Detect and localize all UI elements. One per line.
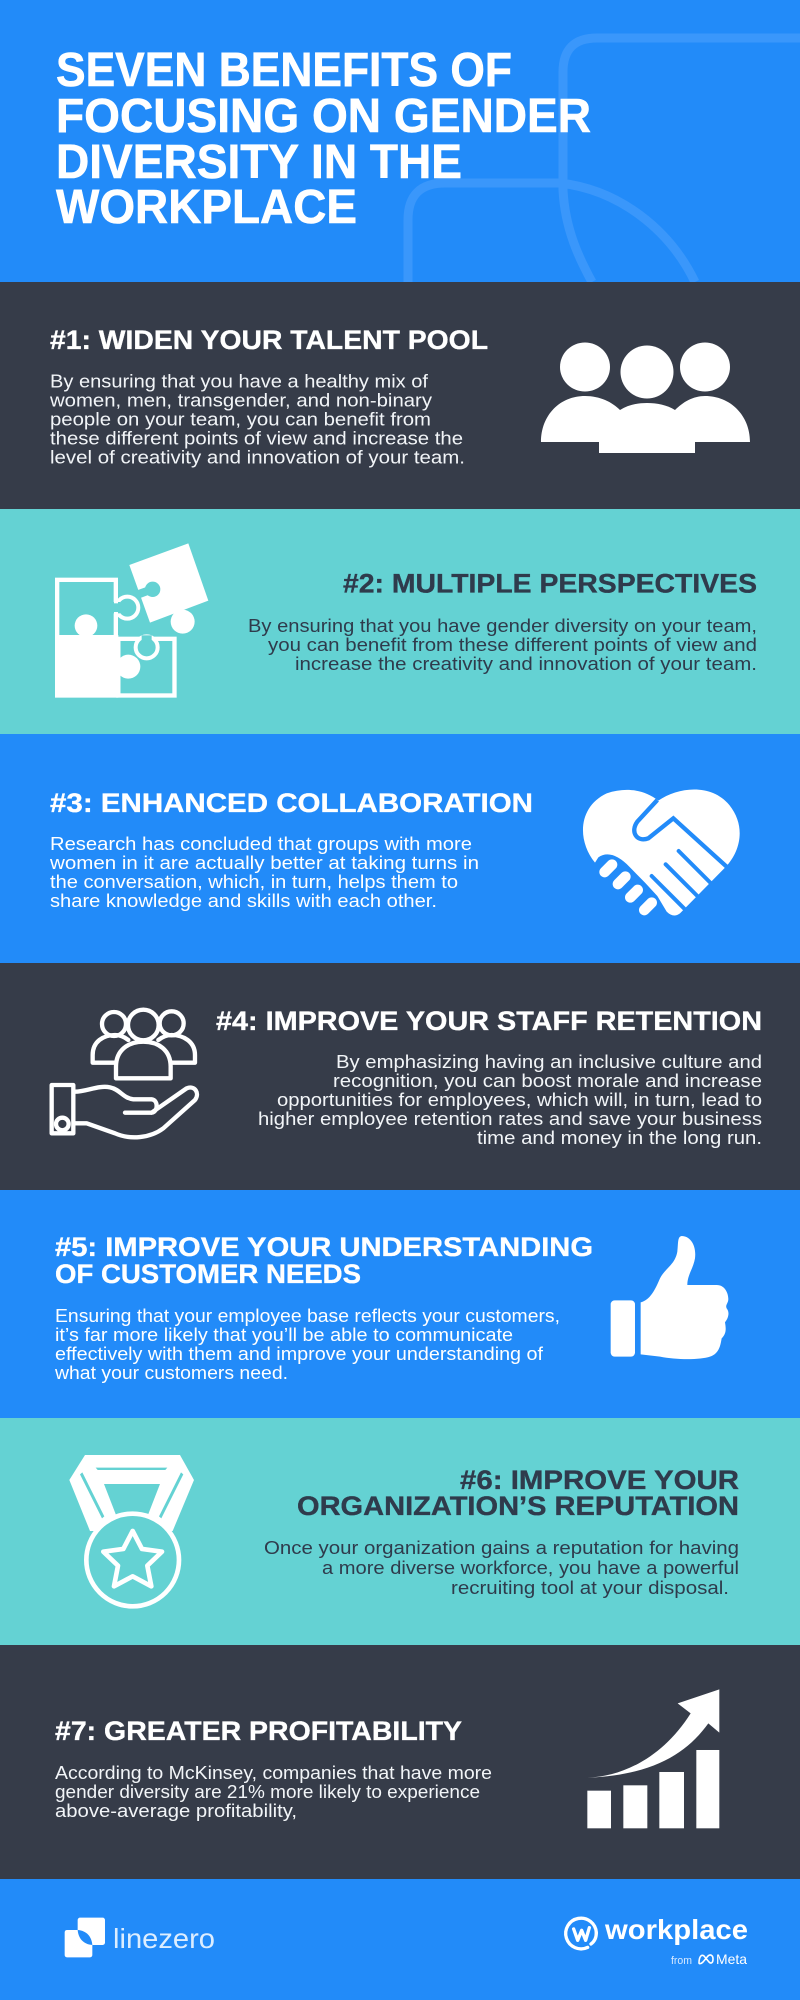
panel: footer: [0, 1879, 800, 2000]
text block 3: the conversation, which, in turn, helps them to: [50, 871, 458, 892]
icon: handshake heart: [583, 789, 740, 915]
logo: linezero: [65, 1918, 215, 1957]
text block 6: recruiting tool at your disposal.: [451, 1577, 729, 1598]
text block 6: Once your organization gains a reputation for having: [264, 1537, 739, 1558]
title: DIVERSITY IN THE: [56, 136, 462, 189]
text block 5: [54, 1305, 560, 1383]
heading 7: #7: GREATER PROFITABILITY: [55, 1716, 462, 1746]
text block 6: a more diverse workforce, you have a powerful: [322, 1557, 739, 1578]
text block 4: By emphasizing having an inclusive culture and: [336, 1051, 762, 1072]
panel: benefit 3: [0, 734, 800, 963]
heading 5: OF CUSTOMER NEEDS: [55, 1259, 361, 1289]
text block 2: you can benefit from these different points of view and: [268, 634, 757, 655]
icon: rising bar chart with arrow: [587, 1689, 719, 1828]
panel: benefit 7: [0, 1645, 800, 1879]
text block 1: people on your team, you can benefit from: [50, 408, 431, 430]
text block 1: level of creativity and innovation of your team.: [50, 446, 465, 468]
heading 6: #6: IMPROVE YOUR: [460, 1465, 739, 1495]
heading 3: #3: ENHANCED COLLABORATION: [50, 788, 533, 818]
panel: benefit 5: [0, 1190, 800, 1418]
text block 2: [248, 615, 757, 674]
panel: benefit 2: [0, 509, 800, 734]
text block 4: higher employee retention rates and save your business: [258, 1108, 762, 1129]
title: WORKPLACE: [56, 181, 357, 234]
text block 1: women, men, transgender, and non-binary: [49, 390, 433, 410]
logo: linezero: linezero: [113, 1923, 215, 1954]
icon: thumbs up: [611, 1236, 728, 1359]
logo: workplace from Meta: Meta: [716, 1951, 747, 1967]
text block 2: By ensuring that you have gender diversity on your team,: [248, 615, 757, 636]
heading 2: #2: MULTIPLE PERSPECTIVES: [343, 568, 757, 598]
text block 5: effectively with them and improve your understanding of: [55, 1343, 544, 1364]
panel: title header: [0, 0, 800, 283]
logo: workplace from Meta: [566, 1914, 748, 1967]
text block 7: above-average profitability,: [55, 1800, 297, 1821]
icon: group of people: [541, 342, 750, 453]
text block 5: what your customers need.: [54, 1362, 288, 1383]
text block 6: [264, 1537, 739, 1598]
heading 6: [297, 1465, 739, 1521]
heading 1: #1: WIDEN YOUR TALENT POOL: [50, 325, 488, 355]
heading 5: #5: IMPROVE YOUR UNDERSTANDING: [55, 1232, 593, 1262]
text block 5: it’s far more likely that you’ll be able to communicate: [55, 1324, 513, 1345]
title: [56, 44, 591, 234]
text block 3: [49, 833, 479, 911]
panel: benefit 6: [0, 1418, 800, 1645]
text block 3: Research has concluded that groups with more: [50, 833, 472, 854]
text block 4: opportunities for employees, which will, in turn, lead to: [277, 1089, 762, 1110]
text block 2: increase the creativity and innovation of your team.: [295, 653, 757, 674]
panel: benefit 1: [0, 282, 800, 509]
text block 5: Ensuring that your employee base reflects your customers,: [55, 1305, 560, 1326]
text block 7: gender diversity are 21% more likely to experience: [55, 1781, 480, 1802]
title: FOCUSING ON GENDER: [56, 90, 591, 143]
text block 3: women in it are actually better at taking turns in: [49, 852, 479, 873]
text block 7: [55, 1762, 492, 1821]
text block 1: these different points of view and increase the: [50, 428, 463, 448]
text block 4: [258, 1051, 762, 1148]
icon: puzzle pieces: [55, 543, 208, 698]
logo: workplace from Meta: workplace: [604, 1914, 748, 1945]
text block 4: recognition, you can boost morale and increase: [333, 1070, 762, 1091]
logo: workplace from Meta: from: [671, 1955, 692, 1967]
icon: medal with star: [69, 1455, 194, 1606]
icon: hand holding people: [52, 1010, 197, 1137]
text block 4: time and money in the long run.: [477, 1127, 762, 1148]
heading 5: [55, 1232, 593, 1289]
text block 1: [49, 370, 465, 468]
panel: benefit 4: [0, 963, 800, 1190]
heading 4: #4: IMPROVE YOUR STAFF RETENTION: [216, 1006, 762, 1036]
text block 1: By ensuring that you have a healthy mix of: [50, 370, 429, 392]
text block 3: share knowledge and skills with each other.: [50, 890, 437, 911]
heading 6: ORGANIZATION’S REPUTATION: [297, 1491, 739, 1521]
title: SEVEN BENEFITS OF: [56, 44, 512, 97]
text block 7: According to McKinsey, companies that have more: [55, 1762, 492, 1783]
